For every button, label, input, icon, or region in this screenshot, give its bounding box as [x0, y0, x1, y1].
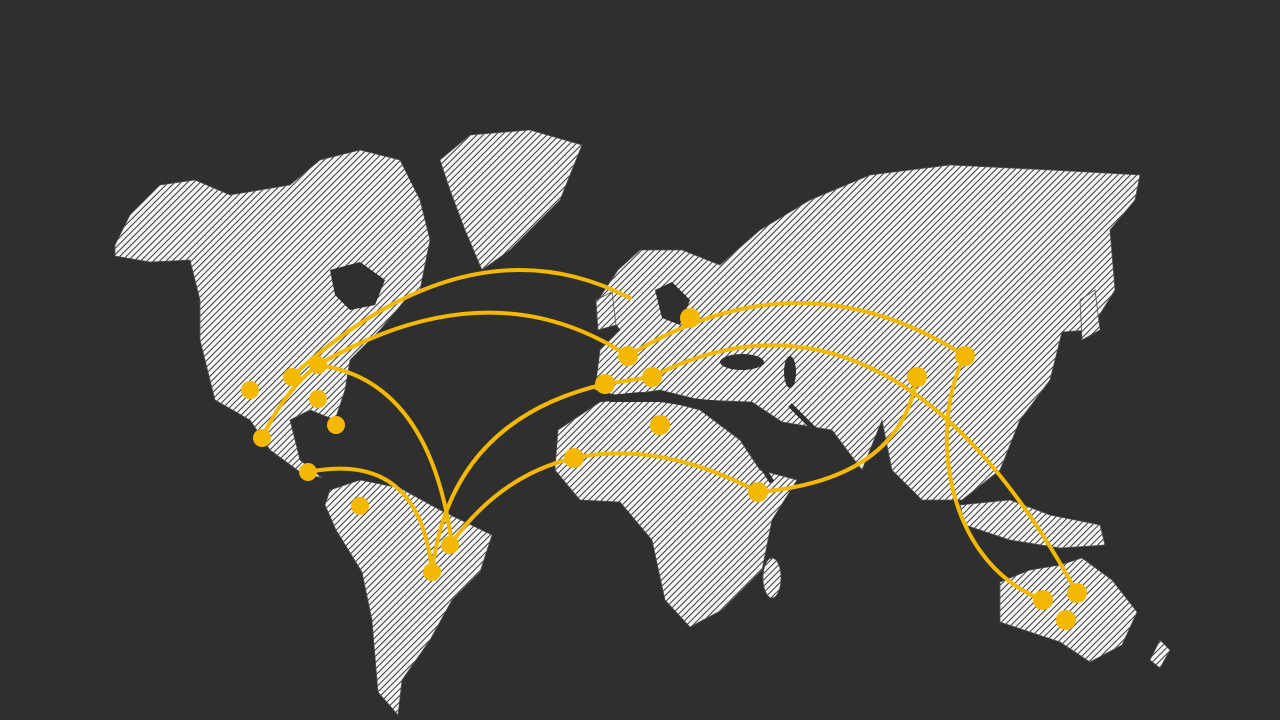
land masses: [115, 130, 1170, 715]
continent: north america: [115, 150, 430, 478]
continent: south america: [325, 480, 492, 715]
continent: eurasia: [595, 165, 1140, 500]
inland seas: [330, 262, 796, 408]
islands: southeast asia: [960, 500, 1105, 548]
location markers: [241, 308, 1087, 630]
island: new zealand: [1150, 640, 1170, 668]
island: japan: [1080, 290, 1100, 340]
continent: australia: [1000, 558, 1137, 662]
island: madagascar: [763, 558, 781, 598]
routes: [262, 270, 1077, 600]
island: uk: [596, 292, 616, 330]
continent: greenland: [440, 130, 582, 270]
continent: africa: [555, 397, 797, 627]
